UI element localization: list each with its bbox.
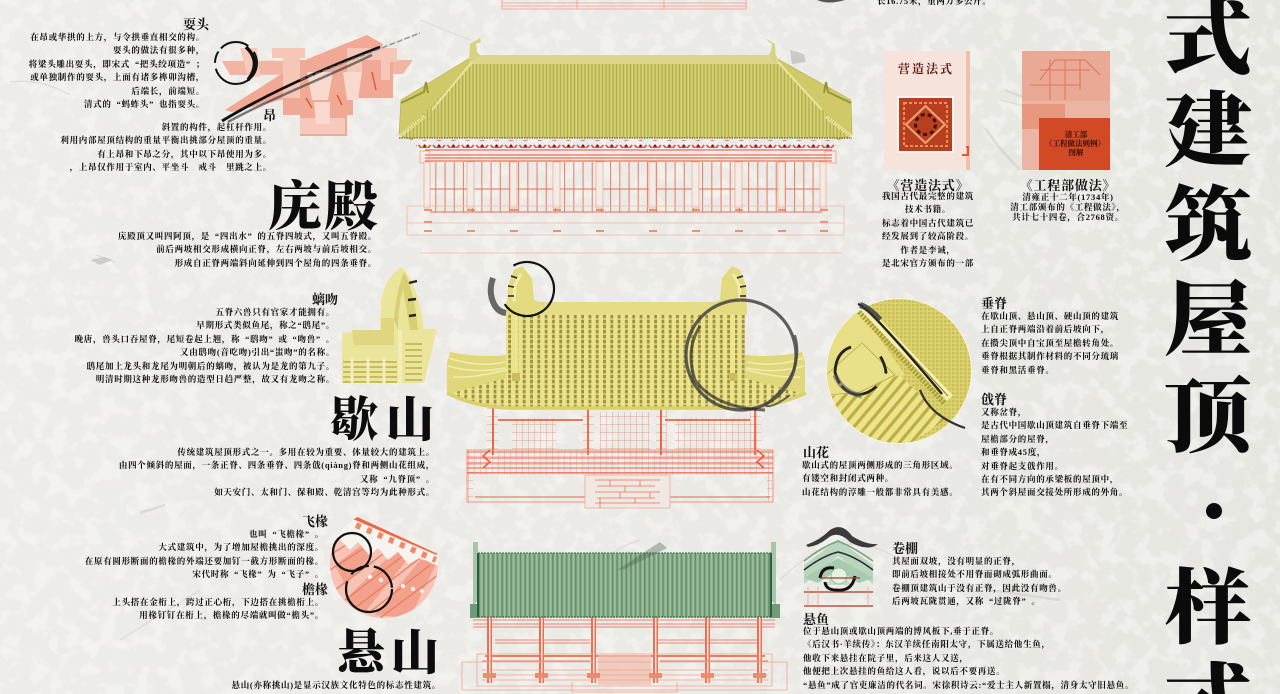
text: chiwen: 鸱尾加上龙头和龙尾为明朝后的螭吻，被认为是龙的第九子。: [87, 361, 335, 371]
text: qiangji: 其两个斜屋面交接处所形成的外角。: [981, 487, 1128, 497]
text: qiangji: 和垂脊成45度，: [981, 447, 1046, 457]
text: yanchuan: 用椽钉钉在桁上，檐椽的尽端就叫做“檐头”。: [139, 610, 324, 620]
text: juanpeng: 即前后坡相接处不用脊而砌成弧形曲面。: [892, 569, 1058, 579]
text: ang: [60, 122, 272, 172]
text: chiwen: [75, 307, 335, 384]
heading: shuatou: 耍头: [183, 17, 209, 32]
text: yingzao fashi: [882, 191, 974, 268]
title: vertical heading: 筑: [1164, 181, 1252, 272]
text: chiwen: 又由鸱吻(音吃吻)引出“蚩吻”的名称。: [180, 347, 335, 357]
heading: chuiji: 垂脊: [981, 296, 1007, 311]
illustration: hip roof hall (wudian): [399, 38, 852, 253]
text: chiwen: 五脊六兽只有官家才能拥有。: [215, 307, 335, 317]
book: gongcheng zuofa: 清工部: [1065, 129, 1088, 139]
illustration: yellow ridge circle: [826, 298, 972, 444]
text: shanhua: 歇山式的屋顶两侧形成的三角形区域。: [802, 460, 958, 470]
text: wudian: 形成自正脊两端斜向延伸到四个屋角的四条垂脊。: [175, 258, 377, 268]
book: gongcheng zuofa: 《工程做法则例》: [1045, 138, 1105, 148]
text: xieshan: 由四个倾斜的屋面，一条正脊、四条垂脊、四条戗(qiàng)脊和两侧山花组成，: [119, 460, 435, 470]
text: juanpeng: 其屋面双坡，没有明显的正脊，: [892, 556, 1021, 566]
lower structure: [467, 405, 773, 508]
text: qiangji: 又称岔脊，: [981, 407, 1027, 417]
text: yanchuan: 上头搭在金桁上，跨过正心桁，下边搭在挑檐桁上。: [112, 597, 324, 607]
text: shuatou: 将梁头雕出耍头，即宋式 “把头绞项造” ；: [29, 59, 205, 69]
title: vertical heading: 屋: [1164, 276, 1252, 367]
text: ang: 有上昂和下昂之分，其中以下昂使用为多。: [97, 149, 272, 159]
text: shuatou: [29, 32, 205, 109]
text: xuanshan: 悬山(亦称挑山)是显示汉族文化特色的标志性建筑。: [232, 680, 441, 690]
text: xuanyu: 位于悬山顶或歇山顶两端的博风板下,垂于正脊。: [803, 626, 999, 636]
text: xieshan: 又称 “九脊顶” 。: [360, 474, 435, 484]
text: shanhua: 山花结构的淳雕一般都非常具有美感。: [802, 487, 958, 497]
text: shuatou: 或单独制作的耍头，上面有诸多榫卯沟槽，: [30, 72, 205, 82]
text: shanhua: [802, 460, 958, 497]
text: xuanyu: 他收下来悬挂在院子里，后来这人又送，: [803, 653, 969, 663]
text: chiwen: 早期形式类似鱼尾，称之“鸱尾”。: [196, 320, 335, 330]
heading: ang: 昂: [263, 108, 276, 123]
text: xuanyu: 《后汉书·羊续传》：东汉羊续任南阳太守，下属送给他生鱼，: [803, 639, 1051, 649]
text: gongcheng zuofa: [1010, 192, 1126, 222]
fragment: top building base: [502, 0, 746, 9]
ink circles: [333, 533, 392, 612]
text: shuatou: 耍头的做法有很多种，: [113, 45, 205, 55]
heading: qiangji: 戗脊: [981, 392, 1007, 407]
text: wudian: 前后两坡相交形成横向正脊，左右两坡与前后坡相交。: [156, 244, 377, 254]
text: chuiji: 在攒尖顶中自宝顶至屋檐转角处。: [981, 338, 1119, 348]
heading: juanpeng: 卷棚: [892, 541, 918, 556]
book: gongcheng zuofa: [1022, 51, 1110, 170]
title: vertical heading: 样: [1164, 564, 1252, 655]
heading: shanhua: 山花: [803, 445, 829, 460]
heading: yanchuan: 檐椽: [302, 582, 328, 597]
text: shuatou: 清式的 “蚂蚱头” 也指耍头。: [84, 99, 205, 109]
green roof: [478, 553, 771, 617]
ink circles: [490, 252, 797, 410]
eave wings: [447, 352, 507, 407]
text: chuiji: 垂脊和黑活垂脊。: [981, 365, 1055, 375]
structure: [462, 617, 787, 692]
illustration: rafter detail circle: [330, 517, 438, 618]
text: feichuan: 在原有圆形断面的檐椽的外端还要加钉一截方形断面的椽。: [85, 556, 324, 566]
text: xieshan: 如天安门、太和门、保和殿、乾清宫等均为此种形式。: [214, 487, 435, 497]
text: feichuan: 大式建筑中，为了增加屋檐挑出的深度。: [158, 542, 324, 552]
heading: xuanyu: 悬鱼: [803, 612, 829, 627]
text: yanchuan: [112, 597, 324, 620]
text: xuanyu: 他便把上次悬挂的鱼给这人看，说以后不要再送。: [803, 666, 1005, 676]
text: xieshan: [119, 447, 435, 497]
illustration: juanpeng roof detail: [804, 527, 878, 606]
title: vertical heading: 顶: [1164, 373, 1252, 464]
text: gongcheng zuofa: 清雍正十二年(1734年): [1022, 192, 1114, 202]
illustration: dougong bracket: [215, 33, 420, 136]
text: yingzao fashi: 我国古代最完整的建筑: [882, 191, 974, 201]
ink mark at top: [817, 0, 845, 2]
roof: [399, 38, 852, 140]
text: yingzao fashi: 是北宋官方颁布的一部: [882, 258, 974, 268]
text: wudian: 庑殿顶又叫四阿顶，是 “四出水” 的五脊四坡式，又叫五脊殿。: [118, 231, 377, 241]
title: vertical heading: 建: [1164, 87, 1252, 178]
illustration: xuanshan hall: [462, 542, 787, 692]
heading: xieshan: 歇山: [330, 394, 442, 447]
text: chuiji: 在歇山顶、悬山顶、硬山顶的建筑: [981, 311, 1119, 321]
beams: [425, 150, 832, 161]
text: feichuan: [85, 529, 324, 579]
text: feichuan: 也叫 “飞檐椽” 。: [249, 529, 324, 539]
text: juanpeng: 卷棚顶建筑山于没有正脊，因此没有吻兽。: [892, 583, 1067, 593]
heading: feichuan: 飞椽: [302, 514, 328, 529]
text: feichuan: 宋代时称 “飞椽” 为 “飞子” 。: [192, 569, 324, 579]
text: chuiji: 上自正脊两端沿着前后坡向下，: [981, 324, 1110, 334]
chiwen ornaments: [507, 266, 545, 315]
text: chuiji: [981, 311, 1119, 375]
heading: wudian: 庑殿: [268, 177, 380, 237]
text: chiwen: 明清时期这种龙形吻兽的造型日趋严整，故又有龙吻之称。: [96, 374, 335, 384]
heading: xuanshan: 悬山: [337, 627, 445, 680]
text: yingzao fashi: 作者是李诫，: [900, 245, 956, 255]
text: ang: ，上昂仅作用于室内、平坐斗 戒斗 里跳之上。: [70, 162, 272, 172]
text: xuanyu: [803, 626, 1134, 690]
text: yingzao fashi: 标志着中国古代建筑已: [882, 218, 974, 228]
book: yingzao fashi: [884, 51, 970, 170]
title: vertical heading: [1164, 0, 1252, 694]
text: chuiji: 垂脊根据其制作材料的不同分琉璃: [981, 351, 1119, 361]
text: ang: 斜置的构件，起杠杆作用。: [162, 122, 272, 132]
text: shuatou: 在昂或华拱的上方，与令拱垂直相交的构。: [30, 32, 205, 42]
book: gongcheng zuofa: 图解: [1068, 147, 1084, 157]
illustration: chiwen detail: [342, 267, 437, 383]
text: qiangji: [981, 407, 1128, 497]
heading: yingzao fashi: 《营造法式》: [887, 178, 969, 193]
text: shuatou: 后端长，前端短。: [131, 86, 205, 96]
text: xuanyu: “悬鱼”成了官吏廉洁的代名词。宋徐积诗云:“爱士主人新置榻，清身太守旧悬鱼。: [803, 680, 1134, 690]
text: wudian: [118, 231, 377, 268]
text: shanhua: 有镂空和封闭式两种。: [802, 473, 894, 483]
platform: [407, 206, 844, 253]
text: gongcheng zuofa: 共计七十四卷，合2768资。: [1012, 212, 1124, 222]
text: gongcheng zuofa: 清工部颁布的《工程做法》，: [1010, 202, 1126, 212]
brackets: [416, 140, 836, 148]
columns and lattice: [430, 162, 822, 212]
heading: gongcheng zuofa: 《工程部做法》: [1020, 178, 1116, 193]
text: xieshan: 传统建筑屋顶形式之一。多用在较为重要、体量较大的建筑上。: [177, 447, 435, 457]
text: qiangji: 是古代中国歇山顶建筑自垂脊下端至: [981, 420, 1128, 430]
text: qiangji: 对垂脊起支戗作用。: [981, 461, 1064, 471]
column bases: [424, 210, 828, 231]
book: yingzao fashi: 营造法式: [898, 61, 954, 76]
text: qiangji: 在有不同方向的承梁板的屋顶中，: [981, 474, 1119, 484]
ink strokes: [835, 304, 965, 428]
roof tiles: [452, 314, 800, 407]
text: chiwen: 晚唐，兽头口吞屋脊，尾短卷起上翘，称 “鸱吻” 或 “吻兽” 。: [75, 334, 335, 344]
text: juanpeng: [892, 556, 1067, 606]
text: yingzao fashi: 技术书籍。: [905, 204, 951, 214]
illustration: xieshan hall: [447, 252, 806, 508]
text: yingzao fashi: 经发展到了较高阶段。: [882, 231, 974, 241]
text: ang: 利用内部屋顶结构的重量平衡出挑部分屋顶的重量。: [60, 135, 272, 145]
text: juanpeng: 后两坡瓦陇贯通，又称 “过陇脊” 。: [892, 596, 1041, 606]
heading: chiwen: 螭吻: [312, 292, 338, 307]
ink: circle and stroke: [215, 33, 420, 122]
books: [884, 51, 1110, 170]
text: qiangji: 屋檐部分的屋脊，: [981, 434, 1055, 444]
